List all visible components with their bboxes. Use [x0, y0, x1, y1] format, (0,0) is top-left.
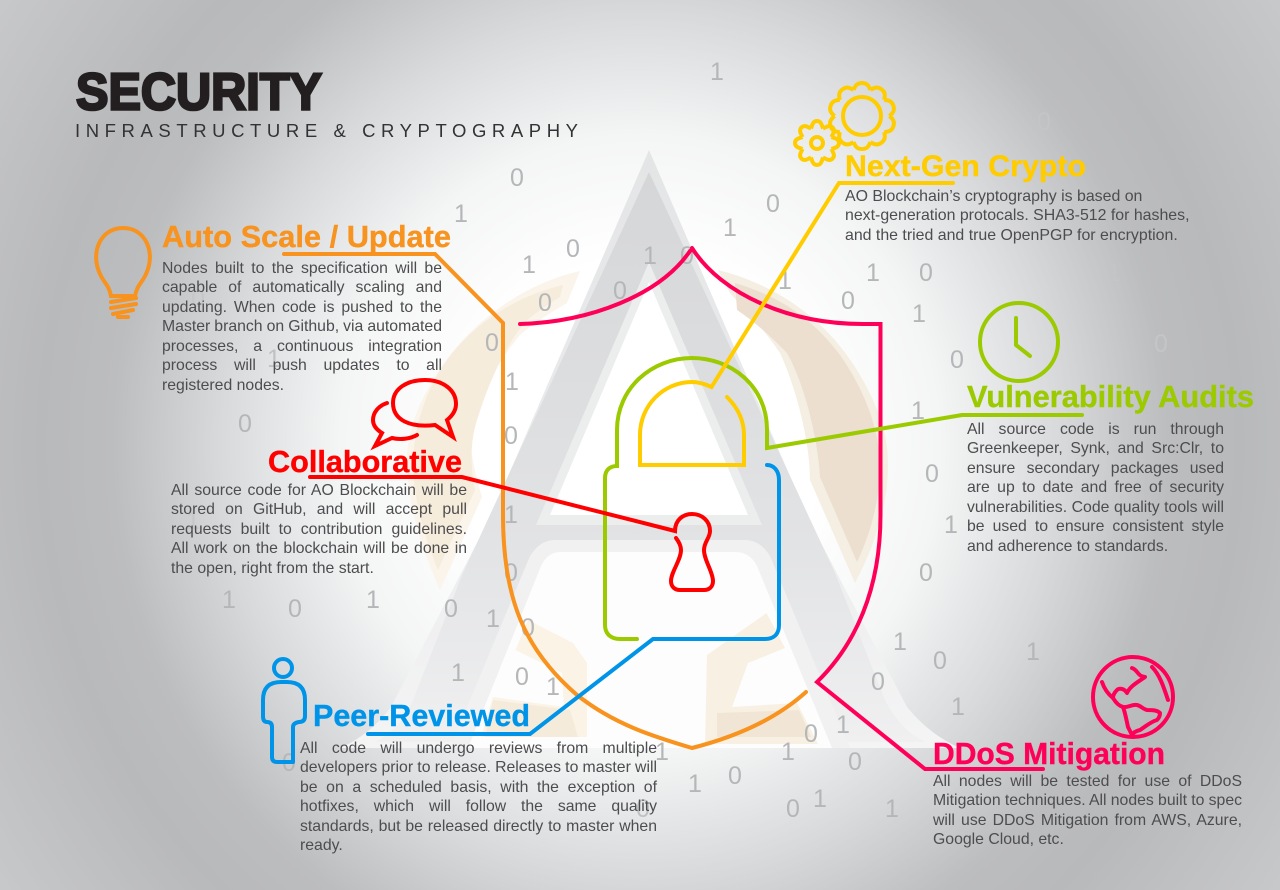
binary digits: 1 — [781, 738, 795, 766]
binary digits: 0 — [521, 614, 535, 642]
heading: Vulnerability Audits: Vulnerability Audits — [967, 379, 1254, 414]
icon: globe — [1091, 655, 1175, 739]
binary digits: 0 — [238, 410, 252, 438]
padlock: yellow inner shackle to Next-Gen Crypto — [640, 183, 953, 465]
panel: Vulnerability Audits — [966, 301, 1254, 555]
text: Auto Scale description — [162, 260, 442, 394]
text: Vulnerability Audits description: are up to date and free of security — [967, 479, 1224, 496]
binary digits: 1 — [267, 345, 281, 373]
padlock: red keyhole to Collaborative — [310, 477, 713, 590]
binary digits: 1 — [486, 605, 500, 633]
binary digits: 1 — [885, 795, 899, 823]
binary digits: 1 — [836, 711, 850, 739]
binary digits: 0 — [680, 242, 694, 270]
text: Vulnerability Audits description — [967, 420, 1224, 555]
binary digits: 0 — [848, 748, 862, 776]
binary digits: 0 — [871, 668, 885, 696]
text: Collaborative description: the open, right from the start. — [171, 560, 374, 577]
binary digits: 1 — [546, 673, 560, 701]
binary digits: 1 — [522, 251, 536, 279]
binary digits: 0 — [288, 595, 302, 623]
title: SECURITY — [76, 64, 322, 122]
binary digits: 0 — [566, 235, 580, 263]
binary digits: 1 — [688, 770, 702, 798]
binary digits: 0 — [282, 749, 296, 777]
binary digits: 0 — [728, 762, 742, 790]
text: Peer-Reviewed description: ready. — [300, 837, 343, 854]
binary digits: 0 — [1154, 330, 1168, 358]
text: DDoS Mitigation description: All nodes will be tested for use of DDoS — [933, 772, 1242, 790]
binary digits: 1 — [504, 501, 518, 529]
binary digits: 1 — [944, 511, 958, 539]
binary digits: 1 — [454, 200, 468, 228]
binary digits: 1 — [1107, 259, 1121, 287]
logo: letter A — [340, 150, 960, 748]
binary digits: 1 — [451, 659, 465, 687]
heading: Auto Scale / Update: Auto Scale / Update — [162, 219, 451, 254]
binary digits: 1 — [723, 214, 737, 242]
text: Auto Scale description: process will push updates to all — [162, 357, 442, 374]
binary digits: 1 — [912, 300, 926, 328]
binary digits: 1 — [505, 368, 519, 396]
icon: light bulb — [94, 226, 152, 319]
binary digits: 1 — [951, 693, 965, 721]
text: Peer-Reviewed description: developers prior to release. Releases to master will — [300, 759, 657, 776]
text: Vulnerability Audits description: and adherence to standards. — [967, 538, 1168, 555]
text: Auto Scale description: registered nodes. — [162, 377, 284, 394]
panel: Next-Gen Crypto — [793, 81, 1190, 244]
binary digits: 1 — [366, 586, 380, 614]
text: DDoS Mitigation description: Google Cloud, etc. — [933, 831, 1064, 848]
icon: chat bubbles — [370, 378, 458, 450]
binary digits: 1 — [813, 785, 827, 813]
padlock: green shackle and body to Vulnerability Audits — [605, 358, 1082, 639]
text: Next-Gen Crypto description: and the tried and true OpenPGP for encryption. — [845, 227, 1178, 244]
subtitle: INFRASTRUCTURE & CRYPTOGRAPHY — [75, 120, 578, 141]
binary digits: 0 — [504, 422, 518, 450]
heading: DDoS Mitigation: DDoS Mitigation — [933, 736, 1165, 771]
binary digits: 0 — [538, 289, 552, 317]
text: Vulnerability Audits description: All source code is run through — [967, 420, 1224, 438]
text: Collaborative description — [171, 482, 467, 577]
binary digits: 0 — [510, 164, 524, 192]
binary digits: 0 — [804, 720, 818, 748]
binary digits: 1 — [643, 242, 657, 270]
binary digits: 0 — [444, 595, 458, 623]
icon: person — [261, 657, 307, 764]
binary digits: 1 — [655, 738, 669, 766]
icon: clock — [978, 301, 1060, 383]
binary digits: 0 — [919, 259, 933, 287]
binary digits: 1 — [893, 628, 907, 656]
text: Peer-Reviewed description: be on a scheduled basis, with the exception of — [300, 779, 657, 796]
binary digits: 1 — [710, 58, 724, 86]
panel: Peer-Reviewed — [261, 657, 658, 854]
binary digits: 0 — [919, 559, 933, 587]
binary digits: 0 — [636, 795, 650, 823]
text: DDoS Mitigation description: will use DDoS Mitigation from AWS, Azure, — [933, 812, 1242, 829]
text: DDoS Mitigation description — [933, 772, 1242, 848]
binary digits: 1 — [866, 259, 880, 287]
text: Collaborative description: requests built to contribution guidelines. — [171, 521, 467, 538]
binary digits: 0 — [1037, 108, 1051, 136]
text: Next-Gen Crypto description — [845, 188, 1190, 244]
text: DDoS Mitigation description: Mitigation techniques. All nodes built to spec — [933, 792, 1242, 809]
binary digits: 0 — [933, 647, 947, 675]
binary digits: 0 — [191, 285, 205, 313]
binary digits: 1 — [222, 586, 236, 614]
text: Auto Scale description: Nodes built to the specification will be — [162, 260, 442, 276]
text: Peer-Reviewed description — [300, 740, 658, 854]
heading: Collaborative: Collaborative — [268, 444, 462, 479]
text: Collaborative description: stored on GitHub, and will accept pull — [171, 501, 467, 518]
panel: DDoS Mitigation — [933, 655, 1242, 848]
text: Next-Gen Crypto description: AO Blockchain’s cryptography is based on — [845, 188, 1142, 204]
panel: Auto Scale / Update — [94, 219, 451, 394]
binary digits: 1 — [186, 507, 200, 535]
text: Vulnerability Audits description: vulnerabilities. Code quality tools will — [967, 499, 1224, 516]
text: Peer-Reviewed description: hotfixes, which will follow the same quality — [300, 798, 657, 815]
binary digits: 1 — [778, 267, 792, 295]
binary digits: 0 — [504, 559, 518, 587]
text: Auto Scale description: updating. When code is pushed to the — [162, 299, 442, 316]
padlock: blue body to Peer-Reviewed — [368, 465, 779, 734]
binary digits: 0 — [515, 663, 529, 691]
icon: gears — [793, 81, 896, 167]
text: Vulnerability Audits description: be used to ensure consistent style — [967, 518, 1224, 535]
text: Next-Gen Crypto description: next-generation protocals. SHA3-512 for hashes, — [845, 207, 1190, 224]
logo: beige arcs — [407, 270, 888, 744]
binary digits: 0 — [766, 190, 780, 218]
heading: Peer-Reviewed: Peer-Reviewed — [313, 698, 530, 733]
binary digits: 0 — [841, 287, 855, 315]
text: Vulnerability Audits description: Greenkeeper, Synk, and Src:Clr, to — [967, 440, 1224, 457]
binary digits: 1 — [1026, 638, 1040, 666]
title block — [75, 64, 578, 141]
binary digits — [186, 58, 1168, 823]
panel: Collaborative — [171, 378, 467, 577]
text: Auto Scale description: Master branch on Github, via automated — [162, 318, 442, 335]
text: Peer-Reviewed description: standards, but be released directly to master when — [300, 818, 657, 835]
binary digits: 1 — [911, 397, 925, 425]
shield: orange segment to Auto Scale — [284, 254, 806, 748]
text: Peer-Reviewed description: All code will undergo reviews from multiple — [300, 740, 657, 756]
text: Auto Scale description: processes, a continuous integration — [162, 338, 442, 355]
text: Collaborative description: All work on the blockchain will be done in — [171, 540, 467, 557]
shield: pink segment to DDoS Mitigation — [520, 248, 1043, 769]
text: Collaborative description: All source code for AO Blockchain will be — [171, 482, 467, 498]
binary digits: 0 — [786, 795, 800, 823]
text: Auto Scale description: capable of automatically scaling and — [162, 279, 442, 296]
binary digits: 0 — [613, 277, 627, 305]
binary digits: 0 — [950, 346, 964, 374]
binary digits: 0 — [925, 460, 939, 488]
heading: Next-Gen Crypto: Next-Gen Crypto — [845, 150, 1086, 183]
binary digits: 0 — [485, 329, 499, 357]
text: Vulnerability Audits description: ensure secondary packages used — [967, 460, 1224, 477]
